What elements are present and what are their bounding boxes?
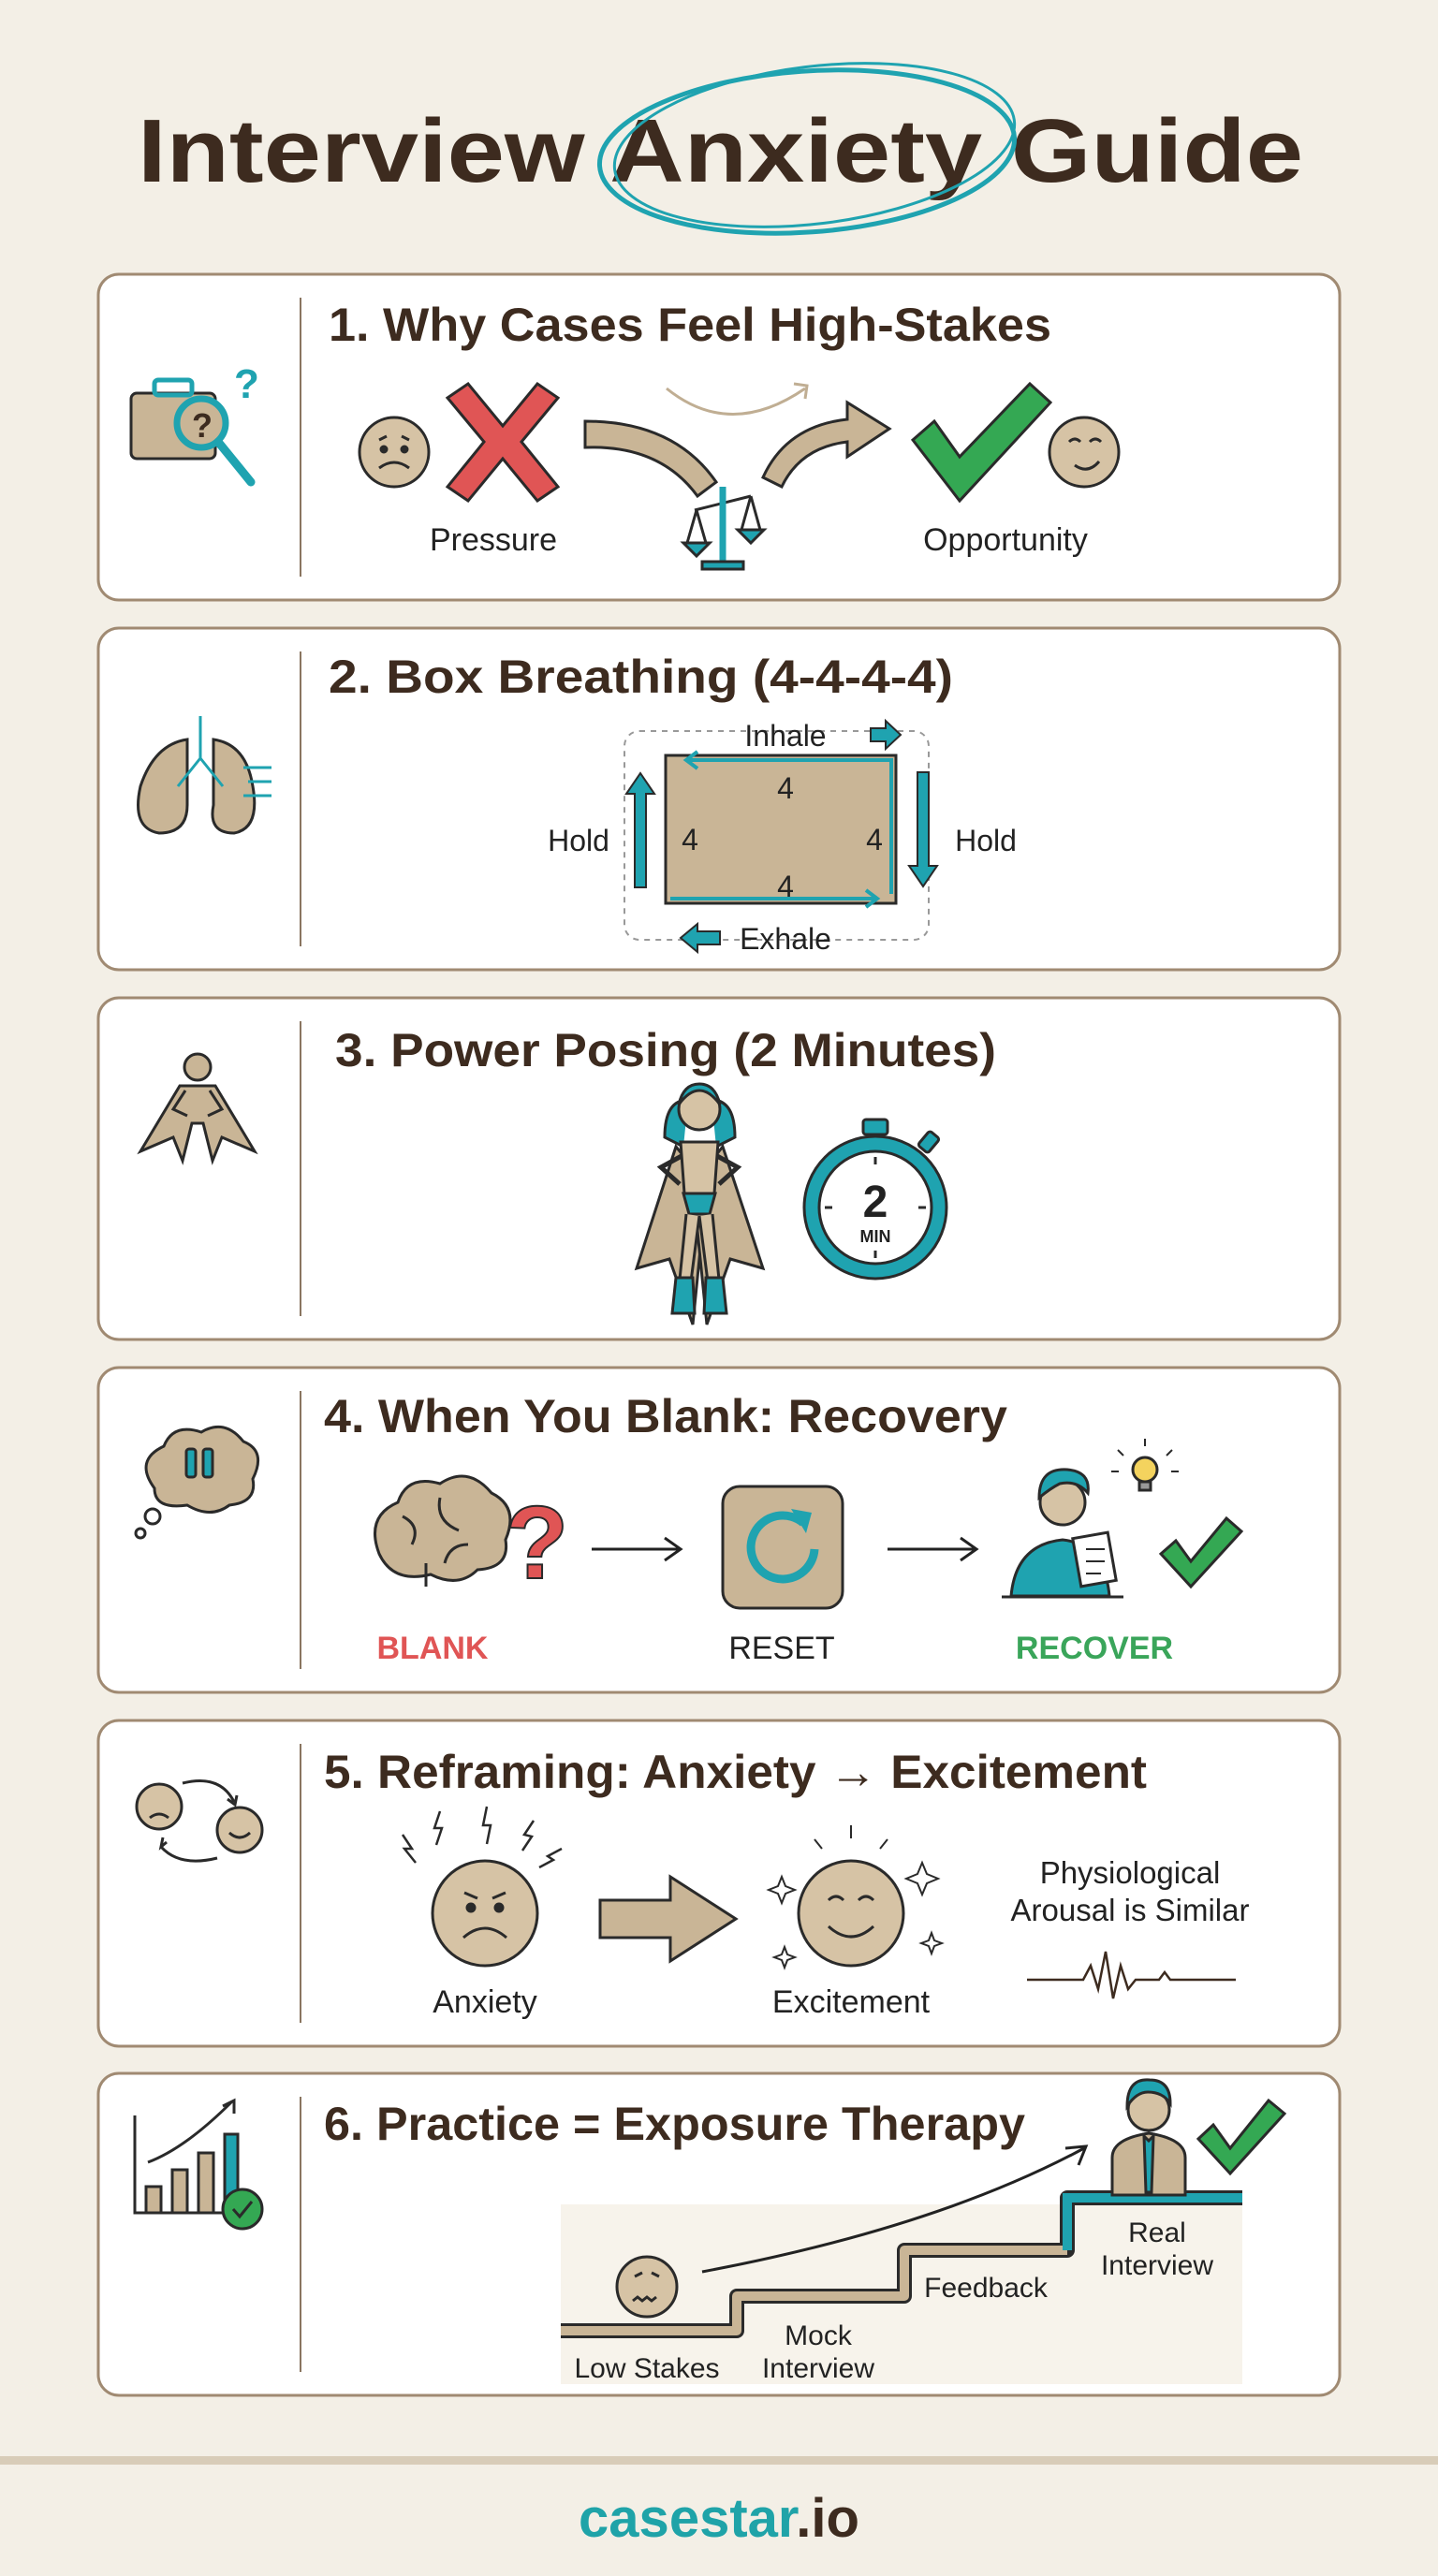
heading 1: 1. Why Cases Feel High-Stakes <box>329 299 1051 351</box>
heading 6: 6. Practice = Exposure Therapy <box>324 2098 1025 2150</box>
arrow 1 <box>592 1538 681 1560</box>
staircase diagram: Feedback <box>924 2273 1049 2304</box>
staircase diagram: Real <box>1128 2217 1186 2248</box>
footer brand: casestar.io <box>579 2488 859 2549</box>
progress arrow <box>702 2146 1086 2272</box>
panel 5: reframing <box>98 1720 1340 2046</box>
panel 3: power posing <box>98 998 1340 1339</box>
labels pressure/opportunity: Pressure <box>430 522 557 558</box>
panel 6: practice = exposure therapy <box>98 2073 1340 2395</box>
box breathing diagram: 4 <box>866 823 883 856</box>
panel 4: when you blank: RECOVER <box>1016 1631 1173 1666</box>
panel 1: why cases feel high-stakes: Opportunity <box>923 522 1088 558</box>
interviewer figure <box>1112 2080 1185 2195</box>
stopwatch: 2 <box>863 1178 888 1227</box>
box breathing diagram <box>548 719 1017 956</box>
icon: briefcase with magnifier: ? <box>192 406 213 445</box>
icon: two faces with cycle <box>137 1780 262 1861</box>
heading 5: 5. Reframing: Anxiety → Excitement <box>324 1746 1147 1798</box>
brain with question mark <box>374 1476 568 1601</box>
big arrow <box>600 1877 736 1961</box>
physiological arousal note: Arousal is Similar <box>1011 1893 1249 1927</box>
person writing with lightbulb <box>1002 1439 1179 1597</box>
excitement face with sparkles <box>769 1825 942 1968</box>
panel 4: when you blank: RESET <box>728 1631 835 1666</box>
heading 2: 2. Box Breathing (4-4-4-4) <box>329 651 953 703</box>
icon: superhero <box>140 1054 255 1161</box>
panel 5: reframing: Excitement <box>772 1984 931 2020</box>
superhero figure <box>637 1084 763 1325</box>
panel 4: when you blank <box>98 1368 1340 1692</box>
box breathing diagram: Inhale <box>744 719 827 753</box>
green check top <box>1198 2100 1284 2174</box>
green check small <box>1161 1518 1241 1587</box>
box breathing diagram: 4 <box>777 870 794 903</box>
icon: briefcase with magnifier <box>131 361 259 482</box>
red X <box>448 384 558 501</box>
icon: lungs <box>139 716 271 833</box>
green check <box>913 384 1050 501</box>
staircase diagram: Low Stakes <box>574 2353 720 2384</box>
box breathing diagram: 4 <box>682 823 698 856</box>
physiological arousal note <box>1011 1855 1249 1998</box>
heading 4: 4. When You Blank: Recovery <box>324 1390 1007 1442</box>
icon: growth chart with check <box>135 2100 262 2229</box>
icon: briefcase with magnifier: ? <box>234 361 259 407</box>
title <box>138 42 1303 248</box>
physiological arousal note: Physiological <box>1040 1855 1220 1890</box>
box breathing diagram: Hold <box>548 824 609 857</box>
panel 2: box breathing <box>98 628 1340 970</box>
footer divider <box>0 2456 1438 2465</box>
staircase diagram <box>561 2198 1242 2384</box>
staircase diagram: Interview <box>1101 2250 1213 2281</box>
arrows pressure to opportunity <box>585 384 889 496</box>
arrow 2 <box>888 1538 976 1560</box>
panel 1: why cases feel high-stakes <box>98 274 1340 600</box>
box breathing diagram: Exhale <box>740 922 831 956</box>
box breathing diagram: 4 <box>777 771 794 805</box>
sad face <box>360 417 429 487</box>
box breathing diagram: Hold <box>955 824 1017 857</box>
stopwatch: MIN <box>859 1227 891 1246</box>
stopwatch <box>804 1120 946 1279</box>
labels blank/reset/recover: BLANK <box>377 1631 489 1666</box>
staircase diagram: Interview <box>762 2353 874 2384</box>
brain with question mark: ? <box>506 1486 568 1601</box>
labels anxiety/excitement: Anxiety <box>433 1984 537 2020</box>
reset icon <box>723 1486 843 1608</box>
scale <box>683 487 764 569</box>
staircase diagram: Mock <box>785 2320 853 2351</box>
happy face <box>1049 417 1119 487</box>
heading 3: 3. Power Posing (2 Minutes) <box>335 1024 996 1076</box>
icon: thought cloud pause <box>136 1427 258 1538</box>
title: Interview Anxiety Guide <box>138 101 1303 201</box>
worried face on stairs <box>617 2257 677 2317</box>
anxiety face with bolts <box>403 1807 562 1966</box>
